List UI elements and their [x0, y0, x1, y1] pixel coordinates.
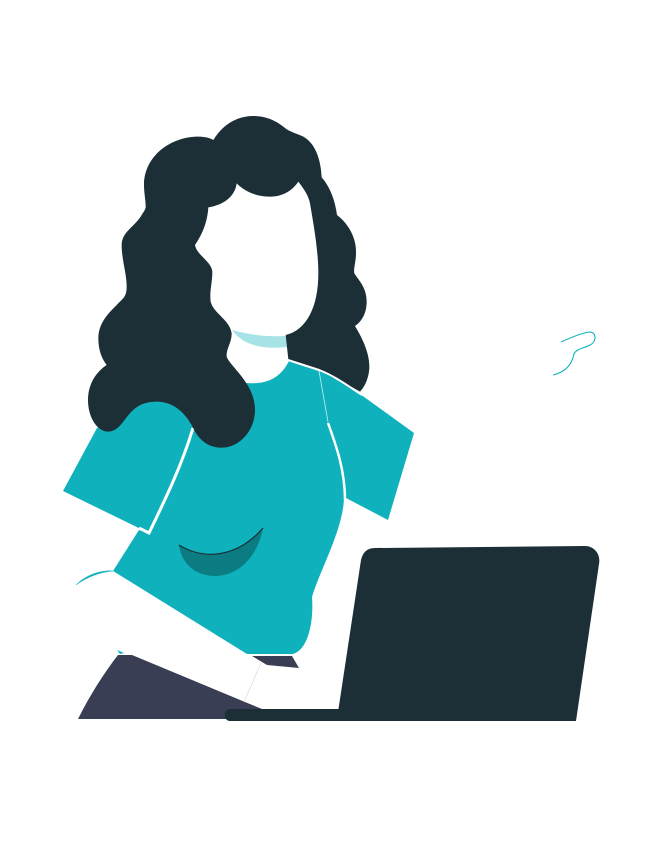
trouser right piece [252, 656, 299, 668]
shirt pocket [179, 528, 263, 576]
left sleeve seam [139, 428, 193, 533]
laptop [225, 546, 599, 721]
right sleeve thin seam [319, 371, 328, 422]
trouser left leg [78, 655, 262, 719]
shirt body and sleeves [63, 361, 414, 654]
hair [88, 116, 369, 448]
trousers [78, 655, 299, 719]
right sleeve thick seam [328, 423, 345, 500]
pocket fill [179, 528, 263, 576]
laptop base [225, 709, 345, 721]
shirt [63, 361, 414, 654]
laptop screen [338, 546, 599, 721]
small teal fragment [117, 650, 124, 654]
decorative squiggle [553, 332, 595, 375]
arm outline [76, 571, 113, 585]
pocket dark edge [179, 528, 263, 554]
neck shadow [232, 330, 287, 348]
shoulder white line [288, 360, 362, 395]
elbow crease line [244, 663, 261, 702]
